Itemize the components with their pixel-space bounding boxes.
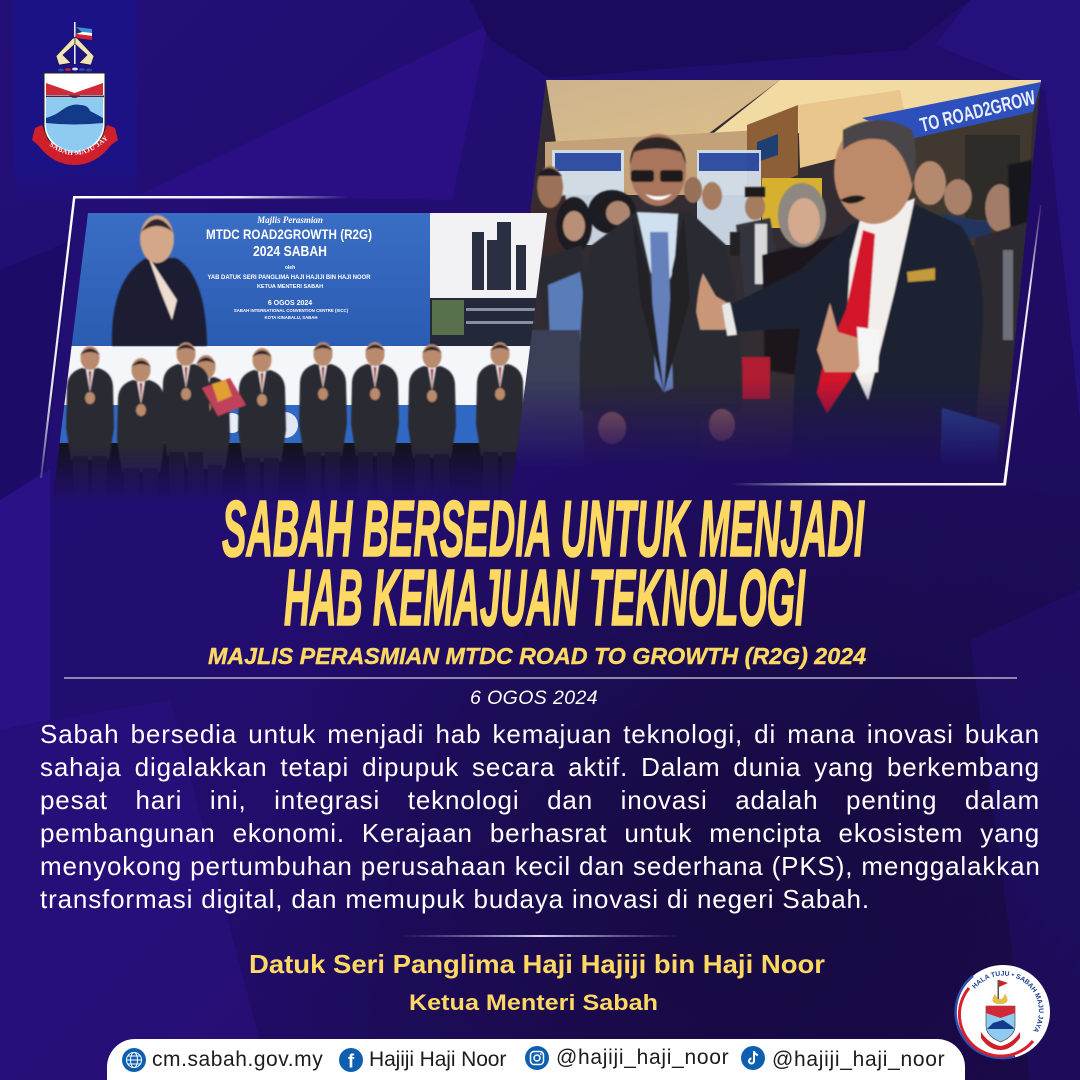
body paragraph: pesat hari ini, integrasi teknologi dan inovasi adalah penting dalam xyxy=(40,785,1040,815)
title xyxy=(222,490,866,640)
screen text: oleh xyxy=(285,265,295,271)
Sabah state crest xyxy=(32,22,118,165)
flag xyxy=(76,27,92,40)
attribution name xyxy=(249,949,825,1015)
body paragraph xyxy=(40,719,1041,914)
Hala Tuju badge: HALA TUJU • SABAH MAJU JAYA xyxy=(972,970,1044,1032)
social contact bar xyxy=(107,1039,965,1080)
exhibit boards xyxy=(552,150,761,245)
body paragraph: Sabah bersedia untuk menjadi hab kemajuan teknologi, di mana inovasi bukan xyxy=(40,719,1040,749)
screen portrait xyxy=(112,215,207,346)
man at left xyxy=(579,133,744,444)
instagram text: @hajiji_haji_noor xyxy=(556,1046,729,1069)
crest hands xyxy=(56,37,94,65)
screen text: 6 OGOS 2024 xyxy=(268,300,312,307)
crowd xyxy=(518,160,1032,448)
Hala Tuju badge xyxy=(954,965,1050,1060)
screen text: MTDC ROAD2GROWTH (R2G) xyxy=(206,226,372,242)
instagram icon xyxy=(525,1046,549,1070)
screen text: YAB DATUK SERI PANGLIMA HAJI HAJIJI BIN HAJI NOOR xyxy=(208,274,371,281)
photo collage xyxy=(40,80,1042,497)
shield xyxy=(44,73,105,159)
attribution name: Datuk Seri Panglima Haji Hajiji bin Haji Noor xyxy=(249,949,825,979)
screen text: SABAH INTERNATIONAL CONVENTION CENTRE (SICC) xyxy=(234,308,349,313)
screen text xyxy=(206,215,372,320)
subtitle: MAJLIS PERASMIAN MTDC ROAD TO GROWTH (R2G) 2024 xyxy=(208,643,866,669)
divider xyxy=(407,935,673,937)
tiktok icon xyxy=(741,1046,765,1070)
facebook text: Hajiji Haji Noor xyxy=(369,1048,506,1071)
screen text: KETUA MENTERI SABAH xyxy=(257,284,323,290)
screen text: Majlis Perasmian xyxy=(256,215,323,225)
body paragraph: menyokong pertumbuhan perusahaan kecil dan sederhana (PKS), menggalakkan xyxy=(40,851,1041,881)
photo: thumbs up xyxy=(515,80,1045,490)
screen text: 2024 SABAH xyxy=(253,243,327,260)
body paragraph: transformasi digital, dan memupuk budaya inovasi di negeri Sabah. xyxy=(40,884,870,914)
man at right xyxy=(696,120,1000,490)
date: 6 OGOS 2024 xyxy=(470,687,598,709)
group of dignitaries xyxy=(65,341,524,472)
motto scroll xyxy=(32,125,118,165)
attribution name: Ketua Menteri Sabah xyxy=(409,990,658,1015)
body paragraph: pembangunan ekonomi. Kerajaan berhasrat untuk mencipta ekosistem yang xyxy=(40,818,1040,848)
photo: stage ceremony xyxy=(54,213,547,497)
tiktok text: @hajiji_haji_noor xyxy=(772,1048,945,1071)
screen text: KOTA KINABALU, SABAH xyxy=(264,315,318,320)
body paragraph: sahaja digalakkan tetapi dipupuk secara aktif. Dalam dunia yang berkembang xyxy=(40,752,1040,782)
website text: cm.sabah.gov.my xyxy=(152,1048,323,1071)
facebook icon xyxy=(339,1048,363,1072)
photo frames xyxy=(40,196,1042,486)
website icon xyxy=(122,1048,146,1072)
facebook icon: f xyxy=(348,1052,355,1072)
